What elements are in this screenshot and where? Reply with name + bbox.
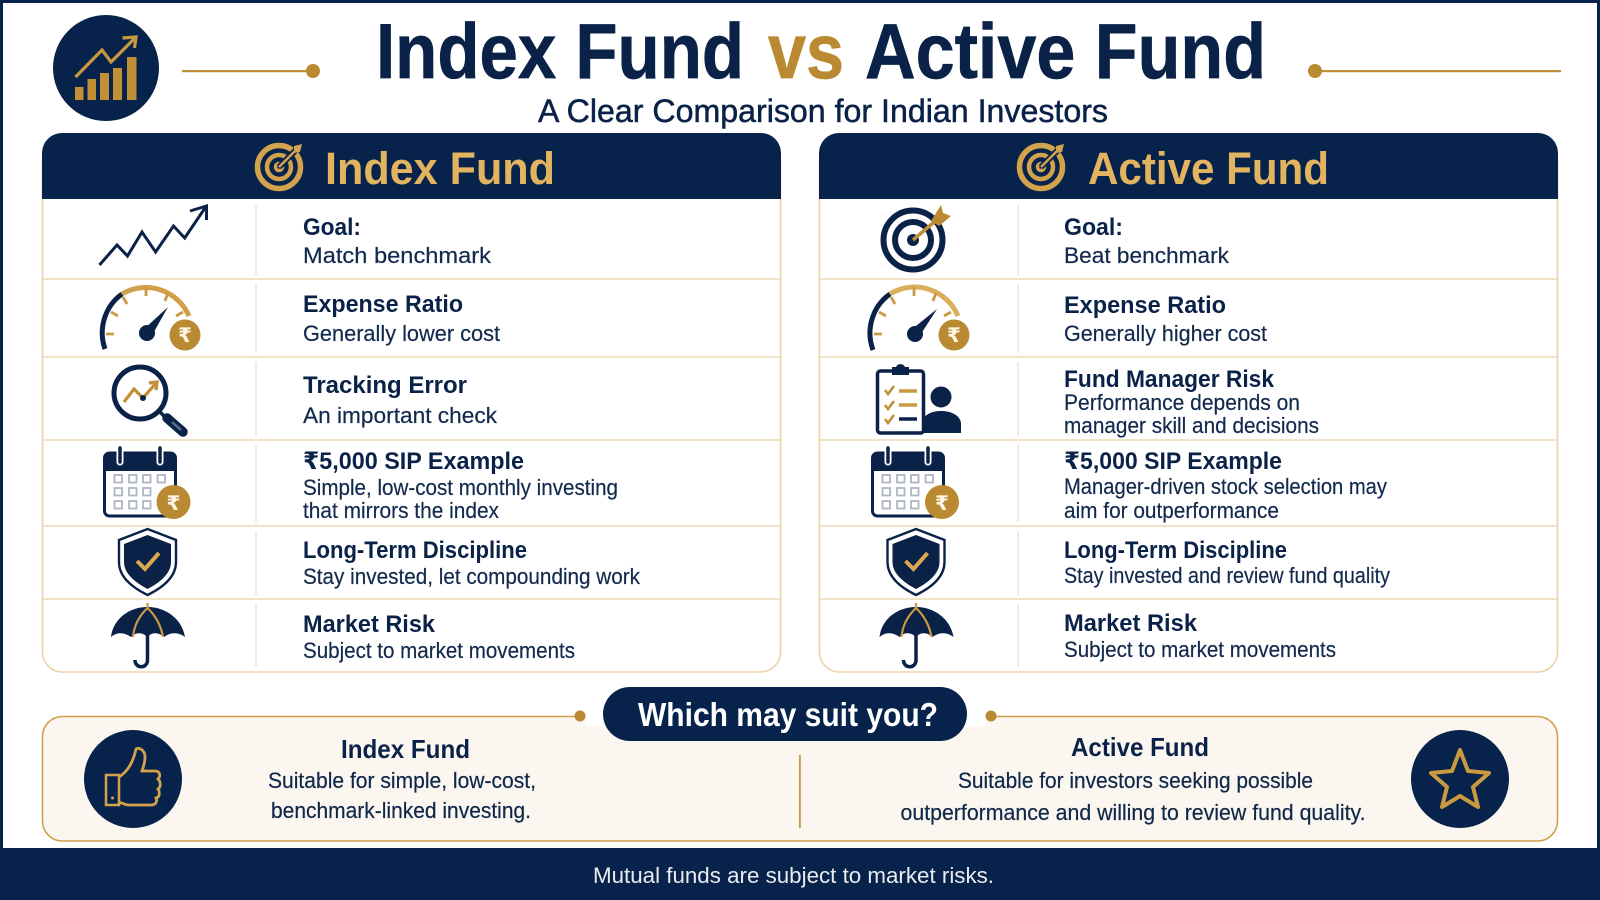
footer bar	[0, 848, 1600, 900]
text: tracking error: Tracking Error	[303, 372, 467, 399]
suitability panel border	[42, 716, 1558, 841]
text: sip example: that mirrors the index	[303, 498, 500, 523]
icon: gauge: ₹	[947, 323, 961, 347]
text: active fund suitability: Suitable for investors seeking possible	[958, 768, 1313, 793]
row: long-term discipline	[888, 529, 1391, 595]
text: expense ratio: Generally higher cost	[1064, 321, 1268, 346]
row: goal	[884, 205, 1230, 270]
title: vs	[768, 7, 844, 95]
logo: growth chart	[53, 15, 159, 121]
text: index fund suitability: Suitable for simple, low-cost,	[268, 768, 536, 793]
text: fund manager risk: manager skill and decisions	[1064, 413, 1319, 438]
icon: bullseye with dart	[884, 205, 951, 270]
icon: shield	[119, 529, 176, 595]
text: active fund suitability: outperformance and willing to review fund quality.	[900, 800, 1366, 825]
header text: Active Fund	[1088, 143, 1329, 194]
connector dots	[574, 710, 996, 722]
text: sip example: aim for outperformance	[1064, 498, 1279, 523]
text: sip example: ₹5,000 SIP Example	[303, 448, 524, 475]
text: sip example	[1064, 448, 1388, 523]
header icon: target	[258, 144, 302, 188]
title connector left	[182, 64, 320, 78]
text: sip example: Simple, low-cost monthly investing	[303, 475, 618, 500]
row: sip example	[104, 448, 618, 523]
text: active fund suitability	[900, 732, 1366, 825]
text: goal	[1064, 214, 1230, 268]
row: market risk	[111, 603, 575, 667]
text: long-term discipline	[303, 537, 641, 589]
panel header bar	[42, 133, 781, 199]
icon: shield	[888, 529, 944, 595]
row: goal	[100, 206, 492, 268]
text: expense ratio: Expense Ratio	[1064, 292, 1226, 319]
header icon: target	[1020, 144, 1064, 188]
icon: rising arrow	[100, 206, 206, 265]
panel: which may suit you	[42, 687, 1558, 841]
icon: star	[1411, 730, 1509, 828]
text: tracking error	[303, 372, 498, 428]
icon: calendar with rupee: ₹	[167, 491, 180, 515]
text: fund manager risk: Fund Manager Risk	[1064, 366, 1275, 393]
text: long-term discipline: Long-Term Discipline	[303, 537, 527, 564]
subtitle: A Clear Comparison for Indian Investors	[538, 93, 1108, 129]
icon: calendar with rupee: ₹	[935, 491, 949, 515]
text: expense ratio: Generally lower cost	[303, 321, 501, 346]
text: sip example: ₹5,000 SIP Example	[1064, 448, 1282, 475]
text: fund manager risk	[1064, 366, 1319, 438]
row: expense ratio	[102, 287, 501, 350]
text: market risk	[1064, 610, 1336, 662]
title: Active Fund	[865, 7, 1266, 95]
suitability panel background	[42, 716, 1558, 841]
text: market risk: Market Risk	[1064, 610, 1198, 637]
text: tracking error: An important check	[303, 403, 498, 428]
text: long-term discipline: Long-Term Discipline	[1064, 537, 1287, 564]
text: market risk: Subject to market movements	[303, 638, 575, 663]
text: long-term discipline	[1064, 537, 1391, 588]
row: long-term discipline	[119, 529, 641, 595]
pill heading: Which may suit you?	[638, 696, 938, 733]
text: expense ratio	[303, 291, 501, 346]
panel frame	[42, 140, 780, 672]
row: market risk	[880, 603, 1336, 667]
row: sip example	[872, 448, 1388, 523]
text: market risk: Subject to market movements	[1064, 637, 1336, 662]
text: fund manager risk: Performance depends on	[1064, 390, 1300, 415]
title	[376, 7, 1266, 95]
text: long-term discipline: Stay invested, let compounding work	[303, 564, 641, 589]
title: Index Fund	[376, 7, 744, 95]
icon: umbrella	[111, 603, 185, 667]
icon: gauge	[870, 287, 970, 350]
icon: gauge	[102, 287, 200, 350]
row: expense ratio	[870, 287, 1268, 350]
panel header bar	[819, 133, 1558, 199]
title connector right	[1308, 64, 1561, 78]
panel: active fund	[819, 133, 1558, 672]
row: fund manager risk	[878, 364, 1319, 438]
icon: calendar with rupee	[872, 448, 959, 519]
text: sip example	[303, 448, 618, 523]
text: market risk: Market Risk	[303, 611, 436, 638]
text: expense ratio: Expense Ratio	[303, 291, 463, 318]
text: index fund suitability: Index Fund	[341, 734, 470, 764]
text: long-term discipline: Stay invested and review fund quality	[1064, 563, 1391, 588]
text: index fund suitability: benchmark-linked investing.	[271, 798, 531, 823]
text: active fund suitability: Active Fund	[1071, 732, 1209, 762]
icon: clipboard with manager	[878, 364, 961, 433]
panel: index fund	[42, 133, 781, 672]
text: goal: Match benchmark	[303, 243, 492, 268]
row: tracking error	[114, 367, 498, 432]
text: index fund suitability	[268, 734, 536, 823]
pill heading	[603, 687, 967, 741]
text: sip example: Manager-driven stock selection may	[1064, 474, 1388, 499]
icon: magnifier	[114, 367, 183, 432]
text: market risk	[303, 611, 575, 663]
icon: gauge: ₹	[178, 323, 192, 347]
header text: Index Fund	[325, 143, 555, 194]
text: goal: Goal:	[303, 214, 361, 241]
text: goal: Beat benchmark	[1064, 243, 1230, 268]
icon: thumbs up	[84, 730, 182, 828]
text: goal	[303, 214, 492, 268]
footer bar: Mutual funds are subject to market risks.	[593, 863, 994, 888]
icon: umbrella	[880, 603, 954, 667]
icon: calendar with rupee	[104, 448, 190, 519]
panel frame	[820, 140, 1558, 672]
text: goal: Goal:	[1064, 214, 1123, 241]
text: expense ratio	[1064, 292, 1268, 346]
